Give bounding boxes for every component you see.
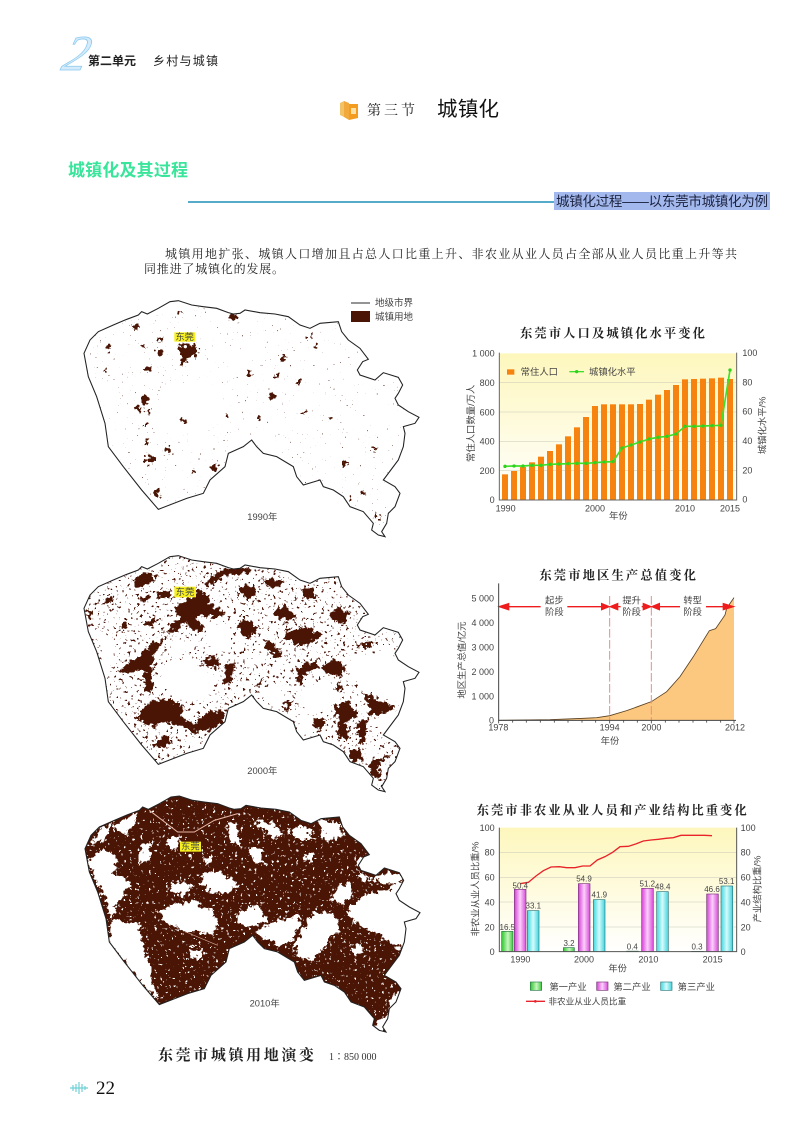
town land mass	[86, 796, 404, 1032]
stage labels: 转型	[683, 595, 702, 606]
plot background	[499, 828, 737, 952]
icon: orange books	[340, 101, 358, 120]
map legend: 城镇用地	[375, 311, 414, 323]
bar value labels: 33.1	[526, 902, 542, 911]
x axis labels	[496, 503, 740, 513]
unit subject: 乡村与城镇	[153, 54, 218, 68]
section title	[340, 98, 499, 121]
map legend	[351, 297, 414, 323]
chart title: 东莞市非农业从业人员和产业结构比重变化	[477, 802, 747, 817]
bar value labels: 0.3	[691, 943, 703, 952]
bar value labels: 53.1	[719, 877, 735, 886]
x axis labels: 2010	[638, 955, 658, 965]
x axis labels: 2000	[585, 503, 605, 513]
city boundary	[84, 556, 419, 792]
scattered settlements	[86, 556, 400, 790]
stage labels: 提升	[622, 595, 641, 606]
chart title: 东莞市地区生产总值变化	[539, 567, 696, 582]
bar value labels: 41.9	[592, 891, 608, 900]
left axis title: 非农业从业人员比重/%	[469, 842, 480, 936]
y axis labels: 2 000	[472, 667, 494, 677]
axes	[499, 583, 736, 720]
chart: non-agricultural employment and industry structure	[469, 802, 763, 1007]
number: 22	[96, 1078, 115, 1099]
secondary industry bars	[514, 884, 718, 952]
chart legend	[526, 981, 715, 1007]
right axis labels	[742, 348, 757, 505]
right axis labels: 100	[742, 348, 757, 358]
x axis labels: 1990	[496, 503, 516, 513]
right axis labels: 0	[741, 947, 746, 957]
case study banner: 城镇化过程——以东莞市城镇化为例	[556, 193, 768, 209]
x axis title: 年份	[609, 510, 628, 521]
left axis labels: 60	[485, 873, 495, 883]
city label: Dongguan: 东莞	[175, 331, 194, 342]
map: 2000	[80, 552, 423, 795]
x axis labels: 2015	[720, 503, 740, 513]
right axis labels	[741, 823, 756, 957]
right axis labels: 40	[742, 436, 752, 446]
town land patches	[87, 568, 395, 778]
map: 2010	[81, 792, 424, 1035]
tertiary industry bars	[527, 886, 733, 952]
chart title: 东莞市人口及城镇化水平变化	[520, 325, 705, 340]
intro paragraph: 城镇用地扩张、城镇人口增加且占总人口比重上升、非农业从业人员占全部从业人员比重上升等共	[165, 246, 737, 261]
section number: 第三节	[367, 102, 415, 119]
x axis labels: 2000	[574, 955, 594, 965]
left axis labels	[480, 823, 495, 957]
bar value labels: 3.2	[563, 939, 575, 948]
left axis labels: 800	[480, 378, 495, 388]
non-urban gaps	[86, 813, 423, 1034]
right axis title: 城镇化水平/%	[757, 397, 768, 454]
x axis labels	[488, 723, 745, 733]
right axis labels: 40	[741, 897, 751, 907]
stage labels: 阶段	[545, 606, 564, 617]
right axis labels: 60	[742, 407, 752, 417]
bar value labels: 48.4	[655, 883, 671, 892]
year label: 2010年	[250, 998, 280, 1009]
primary industry bars	[502, 931, 703, 952]
unit title: 第二单元	[88, 53, 136, 68]
grid	[499, 852, 737, 927]
section name: 城镇化	[437, 98, 499, 121]
axes	[499, 353, 737, 500]
x axis labels: 2010	[675, 503, 695, 513]
icon: unit number 2: 2	[57, 27, 97, 82]
undeveloped clearings	[95, 622, 420, 735]
year label: 2000年	[247, 765, 277, 776]
population bars	[502, 378, 733, 500]
left axis labels: 0	[490, 495, 495, 505]
left axis labels: 200	[480, 466, 495, 476]
grid	[499, 383, 737, 471]
chart legend: 非农业从业人员比重	[548, 996, 627, 1007]
bar value labels: 50.4	[513, 881, 529, 890]
urbanization line	[505, 370, 730, 466]
x axis labels: 2012	[725, 723, 745, 733]
city boundary	[85, 796, 420, 1032]
right axis labels: 80	[742, 377, 752, 387]
city label: Dongguan: 东莞	[181, 841, 200, 852]
bar value labels: 51.2	[640, 880, 656, 889]
y axis labels: 4 000	[472, 618, 494, 628]
stage labels: 阶段	[683, 606, 702, 617]
x axis labels	[510, 955, 723, 965]
employment share line	[520, 835, 712, 884]
y axis title: 地区生产总值/亿元	[456, 621, 467, 699]
x axis ticks	[499, 720, 734, 723]
x axis labels: 1994	[600, 723, 620, 733]
scattered gaps	[86, 798, 400, 1023]
x axis labels: 1990	[510, 955, 530, 965]
heading: urbanization process: 城镇化及其过程	[68, 160, 188, 180]
left axis labels: 1 000	[472, 349, 495, 359]
y axis labels: 0	[489, 716, 494, 726]
y axis labels: 3 000	[472, 642, 494, 652]
stage dividers	[610, 596, 651, 720]
y axis labels: 5 000	[472, 594, 494, 604]
left axis title: 常住人口数量/万人	[465, 385, 476, 462]
map legend: 地级市界	[375, 297, 414, 309]
x axis title: 年份	[608, 963, 628, 974]
bar value labels: 54.9	[576, 875, 592, 884]
left axis labels: 100	[480, 823, 495, 833]
stage labels	[545, 595, 702, 617]
axes	[499, 828, 737, 952]
left axis labels: 0	[490, 947, 495, 957]
bar value labels	[500, 875, 735, 952]
chart legend: 第三产业	[678, 981, 715, 992]
left axis labels	[472, 349, 495, 505]
stage labels: 起步	[545, 596, 564, 606]
map caption	[158, 1046, 376, 1064]
chart legend: 城镇化水平	[589, 366, 636, 377]
chart legend	[507, 366, 636, 377]
x axis title: 年份	[601, 735, 620, 746]
chart legend: 第一产业	[549, 981, 587, 992]
right axis labels: 100	[741, 823, 756, 833]
light road across the north	[149, 810, 238, 832]
left axis labels: 400	[480, 437, 495, 447]
year label: 1990年	[247, 511, 277, 522]
intro paragraph: 同推进了城镇化的发展。	[144, 261, 284, 276]
chart: population and urbanization level	[465, 325, 768, 521]
x axis labels: 2015	[703, 955, 723, 965]
right axis title: 产业结构比重/%	[752, 856, 763, 922]
y axis labels	[472, 594, 494, 726]
chart: regional GDP	[456, 567, 745, 746]
page number	[70, 1078, 115, 1099]
town land patches	[103, 311, 379, 519]
icon: page marker	[70, 1082, 88, 1094]
scattered settlements	[88, 301, 404, 524]
chart legend: 第二产业	[613, 981, 651, 992]
left axis labels: 20	[485, 922, 495, 932]
unit header	[57, 27, 218, 82]
left axis labels: 40	[485, 897, 495, 907]
right axis labels: 20	[741, 922, 751, 932]
stage arrows	[499, 604, 733, 610]
plot background	[499, 353, 737, 500]
city label: Dongguan: 东莞	[176, 586, 194, 597]
right axis labels: 80	[741, 848, 751, 858]
case study banner	[188, 192, 770, 210]
bar value labels: 0.4	[627, 943, 638, 952]
map caption: 东莞市城镇用地演变	[158, 1046, 315, 1064]
right axis labels: 0	[742, 495, 747, 505]
right axis labels: 60	[741, 873, 751, 883]
right axis labels: 20	[742, 465, 752, 475]
x axis labels: 1978	[488, 723, 508, 733]
intro paragraph	[144, 246, 737, 276]
chart legend: 常住人口	[521, 366, 558, 377]
y axis labels: 1 000	[472, 691, 494, 701]
map caption: 1∶850 000	[329, 1052, 376, 1063]
stage labels: 阶段	[622, 606, 641, 617]
empty central and eastern land	[153, 383, 417, 433]
x axis labels: 2000	[641, 723, 661, 733]
map: 1990	[80, 297, 423, 540]
light road across the south	[186, 932, 218, 945]
GDP area	[499, 598, 734, 720]
bar value labels: 46.6	[704, 885, 720, 894]
left axis labels: 600	[480, 407, 495, 417]
left axis labels: 80	[485, 848, 495, 858]
bar value labels: 16.5	[500, 923, 516, 932]
GDP curve	[499, 598, 734, 720]
city boundary	[84, 301, 419, 537]
